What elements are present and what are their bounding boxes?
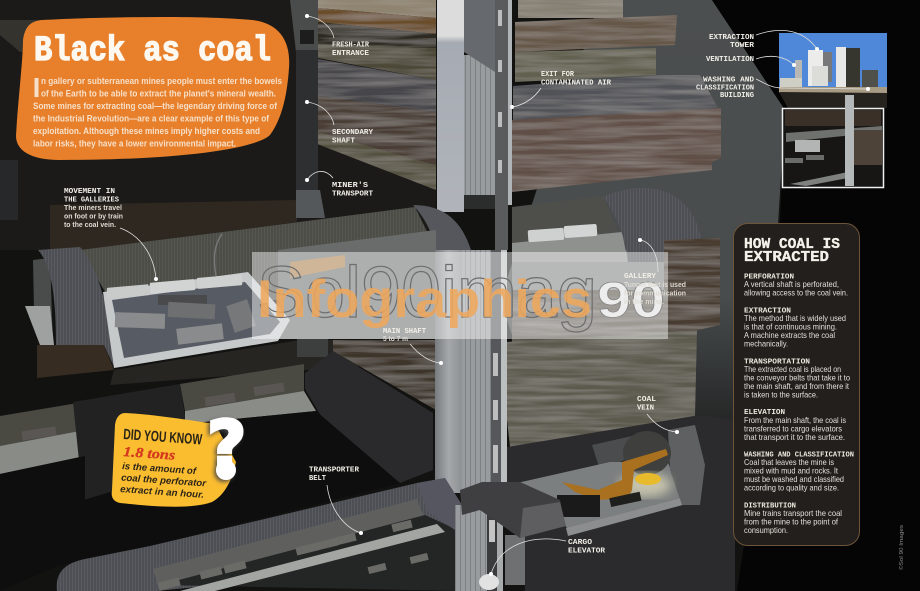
step: extraction: is that of continuous mining. xyxy=(744,322,837,332)
label: miner's transport: MINER'S xyxy=(332,182,369,190)
step: perforation xyxy=(744,274,848,298)
did you know callout xyxy=(112,407,246,507)
back wall xyxy=(80,207,436,300)
secondary shaft xyxy=(290,0,325,218)
step: distribution: consumption. xyxy=(744,525,788,535)
step: washing and classification: WASHING AND CLASSIFICATION xyxy=(744,452,854,460)
watermark band: Sol90imag xyxy=(257,253,597,333)
callout heading: DID YOU KNOW xyxy=(123,426,203,449)
label: cargo elevator: ELEVATOR xyxy=(568,548,606,556)
label: miner's transport: TRANSPORT xyxy=(332,190,374,198)
surface photo xyxy=(779,33,887,108)
step: distribution xyxy=(744,502,842,535)
panel heading xyxy=(744,237,840,266)
callout text: is the amount of xyxy=(122,461,197,477)
step: elevation: ELEVATION xyxy=(744,409,785,417)
step: distribution: DISTRIBUTION xyxy=(744,502,796,510)
label: gallery: Tunnel that is used xyxy=(624,280,686,289)
coal vein chamber xyxy=(507,415,735,591)
step: perforation: PERFORATION xyxy=(744,274,794,282)
main gallery xyxy=(25,205,471,385)
label: gallery: for communication xyxy=(624,288,686,298)
step: extraction: EXTRACTION xyxy=(744,308,791,316)
label: transporter belt xyxy=(309,466,363,535)
label: exit for contaminated air: CONTAMINATED AIR xyxy=(541,80,612,88)
label: secondary shaft: SHAFT xyxy=(332,138,356,146)
label: transporter belt: TRANSPORTER xyxy=(309,466,360,474)
lower left tunnels xyxy=(0,364,316,474)
label: movement in the galleries: MOVEMENT IN xyxy=(64,188,115,196)
panel heading: EXTRACTED xyxy=(744,250,829,266)
step: washing and classification xyxy=(744,452,854,492)
step: transportation: TRANSPORTATION xyxy=(744,358,810,366)
end cap xyxy=(38,247,114,367)
rib highlight xyxy=(214,234,222,276)
label: exit for contaminated air xyxy=(510,71,612,109)
callout figure: 1.8 tons xyxy=(123,445,176,464)
label: miner's transport xyxy=(305,171,374,198)
label: movement in the galleries xyxy=(64,188,158,281)
step: extraction: mechanically. xyxy=(744,338,788,348)
black right field xyxy=(712,0,920,591)
label: extraction tower xyxy=(709,30,819,51)
lower brown rock xyxy=(37,345,114,378)
step: transportation: the conveyor belts that take it to xyxy=(744,372,850,382)
label: movement in the galleries: to the coal vein. xyxy=(64,220,116,229)
step: elevation xyxy=(744,409,846,442)
left wall xyxy=(33,258,53,345)
ground xyxy=(779,87,887,93)
excavator xyxy=(562,449,668,500)
step: distribution: Mine trains transport the coal xyxy=(744,508,842,518)
trains xyxy=(107,274,242,299)
glow xyxy=(619,473,671,497)
rock face xyxy=(668,425,705,505)
transporter belt tunnel xyxy=(57,478,462,591)
intro paragraph: labor risks, they have a lower environmental impact. xyxy=(33,138,236,148)
label: movement in the galleries: on foot or by train xyxy=(64,212,123,220)
main shaft upper xyxy=(437,0,512,250)
strata right of main shaft xyxy=(512,0,721,192)
inset miniature xyxy=(782,95,884,188)
dark tube xyxy=(73,384,185,500)
callout text xyxy=(120,461,208,501)
intro paragraph: of the Earth to be able to extract the planet's mineral wealth. xyxy=(41,88,276,98)
label: secondary shaft: SECONDARY xyxy=(332,129,374,137)
step: perforation: allowing access to the coal vein. xyxy=(744,288,848,298)
label: main shaft: 5 to 7 m xyxy=(383,334,408,343)
label: exit for contaminated air: EXIT FOR xyxy=(541,71,575,79)
sky xyxy=(779,33,887,91)
step: extraction xyxy=(744,308,846,348)
intro paragraph: Some mines for extracting coal—the legendary driving force of xyxy=(33,101,277,111)
floor xyxy=(103,272,290,368)
label: gallery: in the mine. xyxy=(624,297,664,306)
label: main shaft xyxy=(383,328,443,365)
step: washing and classification: must be washed and classified xyxy=(744,474,844,484)
step: extraction: The method that is widely used xyxy=(744,313,846,323)
label: cargo elevator: CARGO xyxy=(568,539,593,547)
intro paragraph: n gallery or subterranean mines people must enter the bowels xyxy=(41,76,282,86)
label: main shaft: MAIN SHAFT xyxy=(383,328,427,336)
step: transportation: is taken to the surface. xyxy=(744,390,818,400)
upper dark rock xyxy=(0,0,436,250)
panel heading: HOW COAL IS xyxy=(744,237,840,253)
image credit: ©Sol 90 Images xyxy=(898,525,905,570)
question mark icon: ? xyxy=(207,407,246,486)
far arch cap xyxy=(413,205,471,250)
label: extraction tower: TOWER xyxy=(730,42,755,50)
label: ventilation: VENTILATION xyxy=(706,56,754,64)
step: transportation xyxy=(744,358,850,400)
right gallery xyxy=(512,188,702,292)
label: washing and classification building: WASHING AND xyxy=(703,76,755,84)
title: Black as coal xyxy=(34,31,271,71)
step: transportation: The extracted coal is placed on xyxy=(744,364,841,374)
label: movement in the galleries: The miners travel xyxy=(64,203,122,212)
label: washing and classification building: CLASSIFICATION xyxy=(696,84,754,92)
dark floor xyxy=(0,411,400,591)
label: extraction tower: EXTRACTION xyxy=(709,34,754,42)
label: ventilation xyxy=(706,56,796,67)
label: fresh-air entrance xyxy=(305,14,370,58)
step: distribution: from the mine to the point of xyxy=(744,516,839,526)
panel: how coal is extracted xyxy=(734,224,860,546)
step: elevation: transferred to cargo elevators xyxy=(744,424,842,434)
intro paragraph: the Industrial Revolution—are a clear example of this type of xyxy=(33,114,269,124)
strata left of main shaft xyxy=(312,0,436,190)
label: washing and classification building: BUILDING xyxy=(720,92,755,100)
under-watermark base xyxy=(278,230,436,339)
cargo elevator structure xyxy=(455,482,566,591)
label: movement in the galleries: THE GALLERIES xyxy=(64,196,120,204)
towers xyxy=(780,47,878,96)
label: secondary shaft xyxy=(305,100,374,146)
label: gallery: GALLERY xyxy=(624,273,657,281)
label: fresh-air entrance: FRESH-AIR xyxy=(332,42,370,50)
callout text: extract in an hour. xyxy=(120,484,204,501)
watermark band: Infographics xyxy=(257,270,592,329)
step: extraction: A machine extracts the coal xyxy=(744,330,835,340)
freight cars xyxy=(115,295,256,345)
gray rock backdrop xyxy=(500,0,785,591)
step: transportation: the main shaft, and from there it xyxy=(744,381,850,391)
step: washing and classification: Coal that leaves the mine is xyxy=(744,457,834,467)
label: transporter belt: BELT xyxy=(309,475,327,483)
intro paragraph: exploitation. Although these mines imply higher costs and xyxy=(33,126,260,136)
callout text: coal the perforator xyxy=(121,473,208,490)
step: elevation: that transport it to the surface. xyxy=(744,432,845,442)
mid right strata xyxy=(333,238,720,447)
step: washing and classification: mixed with mud and rocks. It xyxy=(744,466,839,476)
label: cargo elevator xyxy=(489,539,606,576)
label: coal vein: COAL xyxy=(637,396,657,404)
main shaft lower xyxy=(297,250,507,493)
label: gallery xyxy=(624,238,686,306)
intro paragraph xyxy=(33,76,282,148)
label: washing and classification building xyxy=(696,76,870,100)
orange title panel xyxy=(16,17,289,160)
label: coal vein xyxy=(637,396,679,434)
step: elevation: From the main shaft, the coal is xyxy=(744,415,846,425)
label: fresh-air entrance: ENTRANCE xyxy=(332,50,370,58)
label: coal vein: VEIN xyxy=(637,404,654,412)
step: perforation: A vertical shaft is perforated, xyxy=(744,279,839,289)
watermark band: 90 xyxy=(597,272,665,328)
step: washing and classification: according to quality and size. xyxy=(744,482,839,492)
